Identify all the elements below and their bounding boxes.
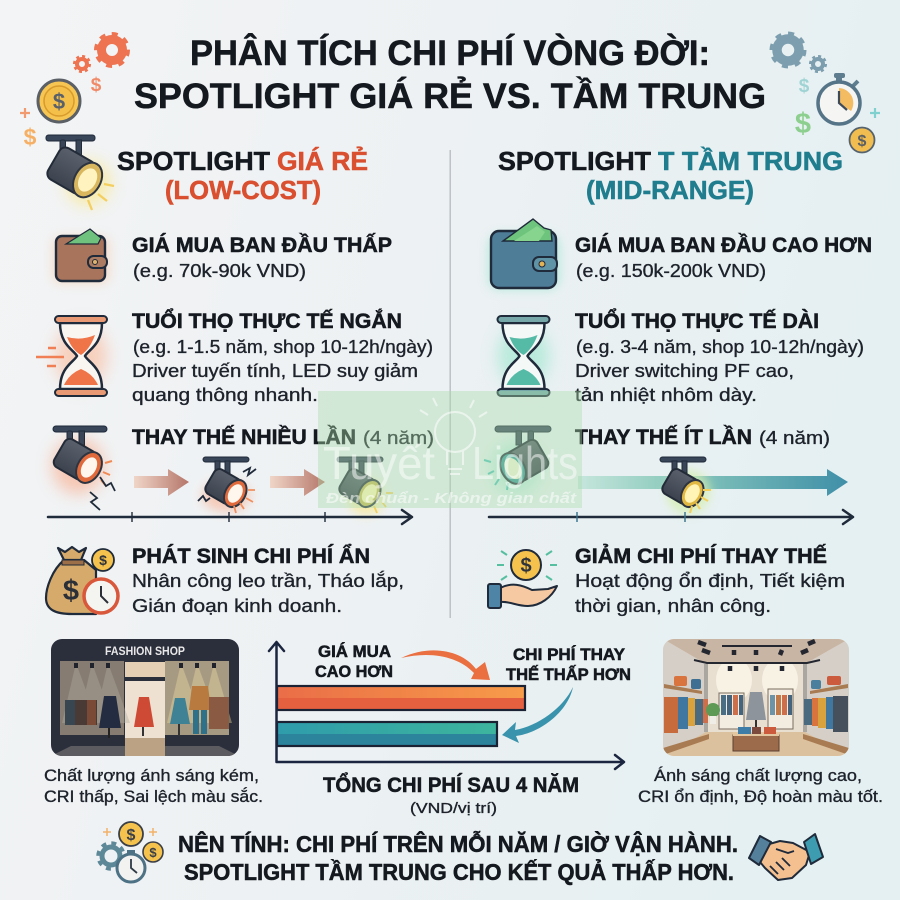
arrow: orange curve [401,650,490,680]
text: short lifespan [132,308,433,405]
chart: total cost after 4 years [269,642,631,817]
label: lower replacement cost [506,645,631,684]
heading: tầm trung: T TẦM TRUNG [658,147,843,176]
panel: mid-range spotlight [484,147,872,616]
decorative icons: gears and stopwatch, right: $ [795,108,811,140]
icon: spotlight 1 [484,426,551,494]
text: hidden costs: Gián đoạn kinh doanh. [132,595,342,616]
icon: blue wallet [488,219,560,290]
item: hidden costs [46,543,404,616]
caption: poor light quality [44,766,263,806]
icon: coins, gear and stopwatch: $ [127,827,136,844]
text: long lifespan: tản nhiệt nhôm dày. [575,384,757,405]
text: long lifespan: Driver switching PF cao, [575,360,794,381]
caption: poor light quality: Chất lượng ánh sáng kém, [44,766,259,785]
decorative icons: gears and stopwatch, right [772,34,880,152]
text: higher purchase price: (e.g. 150k-200k VND) [576,260,766,281]
text: reduced replacement costs: thời gian, nhân công. [575,595,771,616]
text: replaced many times: THAY THẾ NHIỀU LẦN [132,424,356,449]
heading: tầm trung [498,147,843,205]
bars [277,686,525,746]
text: reduced replacement costs: GIẢM CHI PHÍ THAY THẾ [575,543,827,568]
text: low purchase price [132,232,392,281]
heading: tầm trung: (MID-RANGE) [586,177,754,205]
title: SPOTLIGHT GIÁ RẺ VS. TẦM TRUNG [134,76,766,116]
text: higher purchase price [575,232,872,281]
icon: failing spotlight 2 [198,457,256,513]
decorative icons: cost gears and coins, left [20,34,128,150]
icon: replaced spotlight 3 [337,457,393,515]
text: reduced replacement costs [575,543,845,616]
axis label: TỔNG CHI PHÍ SAU 4 NĂM [323,772,579,797]
text: low purchase price: GIÁ MUA BAN ĐẦU THẤP [132,232,392,257]
timeline: left [48,510,412,524]
item: real lifespan [498,308,864,405]
item: real lifespan [36,308,433,405]
icon: money bag and clock [46,547,118,614]
arrow: long service life [578,469,848,496]
icon: hand and coin: $ [520,555,532,577]
panel: low-cost spotlight [36,135,434,616]
heading: tầm trung: SPOTLIGHT [498,148,651,176]
title: PHÂN TÍCH CHI PHÍ VÒNG ĐỜI: [190,33,710,73]
icon: coins, gear and stopwatch [98,822,163,882]
conclusion text: SPOTLIGHT TẦM TRUNG CHO KẾT QUẢ THẤP HƠN. [184,857,734,885]
illustration: dim fashion shop [51,639,239,756]
caption: high light quality [638,766,883,806]
label: shop name: FASHION SHOP [105,646,185,658]
icon: money bag and clock: $ [99,552,107,568]
item: initial purchase price [488,219,872,290]
conclusion text [178,829,738,885]
heading: giá rẻ: SPOTLIGHT [117,148,270,176]
text: reduced replacement costs: Hoạt động ổn định, Tiết kiệm [575,570,845,591]
caption: high light quality: CRI ổn định, Độ hoàn màu tốt. [638,787,883,806]
watermark: Lights [472,437,578,489]
timeline: right [489,510,853,524]
icon: coins, gear and stopwatch: $ [149,845,157,860]
text: short lifespan: Driver tuyến tính, LED suy giảm [132,360,418,381]
item: fewer replacements [484,424,853,524]
text: hidden costs: PHÁT SINH CHI PHÍ ẨN [132,543,370,568]
arrow: replacement 2 [270,469,325,496]
arrow: replacement 1 [134,469,189,496]
text: long lifespan: TUỔI THỌ THỰC TẾ DÀI [575,308,819,333]
text: hidden costs: Nhân công leo trần, Tháo lắp, [132,570,404,591]
icon: hand and coin [488,550,557,608]
text: replaced fewer times [575,424,830,449]
label: lower replacement cost: CHI PHÍ THAY [513,645,625,664]
caption: high light quality: Ánh sáng chất lượng cao, [654,766,862,785]
watermark: Tuyết [323,437,435,489]
item: multiple replacements [48,424,434,524]
decorative icons: gears and stopwatch, right: $ [799,76,810,97]
decorative icons: gears and stopwatch, right: $ [858,133,867,150]
icon: large spotlight [45,135,114,210]
icon: orange hourglass [36,316,107,396]
text: higher purchase price: GIÁ MUA BAN ĐẦU CAO HƠN [575,232,872,257]
center divider [450,150,451,618]
icon: spotlight 2 [660,457,711,514]
text: long lifespan: (e.g. 3-4 năm, shop 10-12h/ngày) [576,336,864,357]
caption: poor light quality: CRI thấp, Sai lệch màu sắc. [44,787,263,806]
decorative icons: cost gears and coins, left: $ [91,75,102,96]
text: low purchase price: (e.g. 70k-90k VND) [133,260,306,281]
decorative icons: cost gears and coins, left: $ [53,89,65,114]
text: long lifespan [575,308,864,405]
axes [269,642,624,769]
watermark: Đèn chuẩn - Không gian chất [326,490,577,507]
text: short lifespan: (e.g. 1-1.5 năm, shop 10-12h/ngày) [133,336,433,357]
text: replaced fewer times: THAY THẾ ÍT LẦN [575,424,752,449]
icon: failing spotlight 1 [51,426,115,510]
icon: teal hourglass [498,316,550,396]
label: higher purchase price: GIÁ MUA [318,642,391,661]
decorative icons: cost gears and coins, left: $ [24,124,37,150]
arrow: teal curve [502,687,573,743]
heading: giá rẻ: GIÁ RẺ [277,146,368,176]
item: reduced replacement costs [488,543,845,616]
label: lower replacement cost: THẾ THẤP HƠN [506,665,631,684]
item: initial purchase price [52,229,392,284]
text: short lifespan: TUỔI THỌ THỰC TẾ NGẮN [132,308,402,333]
icon: handshake [749,834,823,880]
icon: brown wallet [52,229,110,284]
label: higher purchase price: CAO HƠN [315,663,393,681]
watermark [318,391,582,508]
illustration: well-lit fashion shop [663,639,849,756]
conclusion text: NÊN TÍNH: CHI PHÍ TRÊN MỖI NĂM / GIỜ VẬN HÀNH. [178,829,738,857]
heading: giá rẻ [117,146,368,205]
text: hidden costs [132,543,404,616]
axis label: (VND/vị trí) [410,801,497,817]
title [134,33,766,116]
text: replaced fewer times: (4 năm) [759,427,830,448]
axis label [323,772,579,817]
heading: giá rẻ: (LOW-COST) [165,177,321,205]
text: replaced many times: (4 năm) [363,427,434,448]
icon: money bag and clock: $ [63,575,79,607]
label: higher purchase price [315,642,393,681]
text: short lifespan: quang thông nhanh. [132,384,318,405]
